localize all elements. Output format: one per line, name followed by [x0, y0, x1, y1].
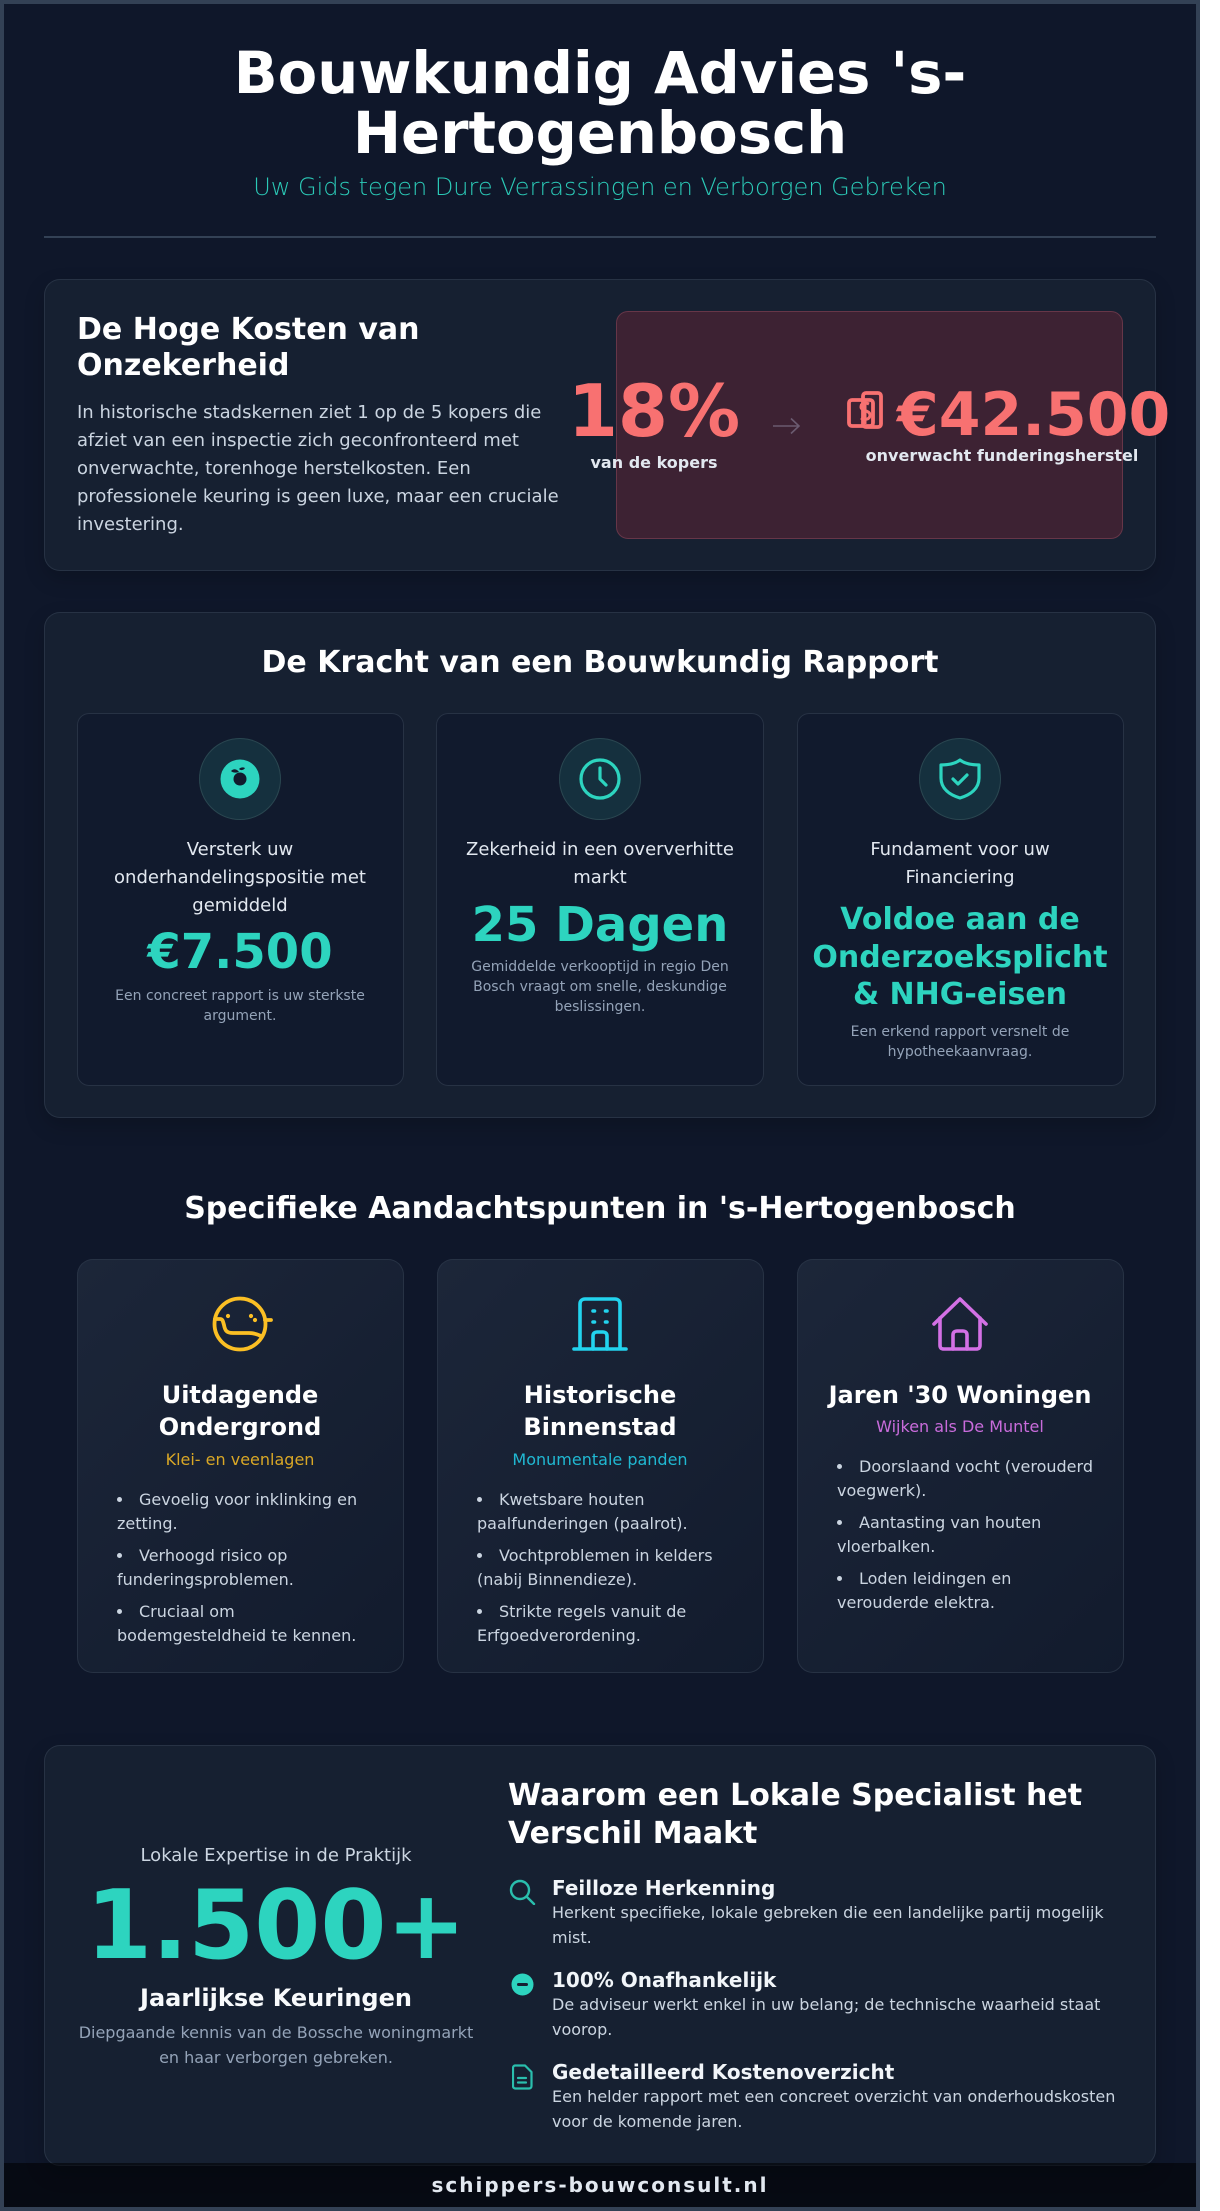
- card: historic centre: [437, 1259, 764, 1673]
- red callout box: [616, 311, 1123, 539]
- title: [234, 40, 966, 167]
- lead text: Versterk uw: [187, 839, 293, 860]
- bullet list: [117, 1490, 357, 1645]
- icon: target disc: [199, 738, 281, 820]
- bullet list: Erfgoedverordening.: [477, 1626, 641, 1645]
- panel: power of a report: [44, 612, 1156, 1118]
- stat label: funderingsherstel: onverwacht funderingsherstel: [866, 446, 1138, 465]
- expertise note: [79, 2023, 473, 2067]
- item text: De adviseur werkt enkel in uw belang; de technische waarheid staat: [552, 1995, 1100, 2014]
- icon: ground face: [212, 1296, 273, 1352]
- key figure: Onderzoeksplicht: [812, 940, 1108, 974]
- footer bar: [4, 2163, 1196, 2207]
- lead text: [466, 839, 734, 888]
- card: financing: [797, 713, 1124, 1086]
- card title: [159, 1381, 321, 1441]
- bullet list: Strikte regels vanuit de: [499, 1602, 686, 1621]
- note: Een erkend rapport versnelt de: [851, 1024, 1069, 1040]
- icon: money: [847, 391, 883, 429]
- key figure: & NHG-eisen: [853, 977, 1067, 1012]
- icon: document: [512, 2064, 533, 2090]
- subtitle: Uw Gids tegen Dure Verrassingen en Verborgen Gebreken: [253, 173, 947, 201]
- heading: [508, 1778, 1082, 1850]
- heading: specific points: Specifieke Aandachtspunten in 's-Hertogenbosch: [184, 1191, 1016, 1226]
- item text: Herkent specifieke, lokale gebreken die een landelijke partij mogelijk: [552, 1903, 1104, 1922]
- key figure label: Jaarlijkse Keuringen: [140, 1984, 412, 2012]
- icon: house: [932, 1297, 988, 1351]
- card title: Binnenstad: [523, 1413, 677, 1441]
- heading: Verschil Maakt: [508, 1816, 757, 1850]
- card: thirties homes: [797, 1259, 1124, 1673]
- card title: Uitdagende: [162, 1381, 318, 1409]
- item title: Feilloze Herkenning: [552, 1876, 775, 1900]
- bullet list: verouderde elektra.: [837, 1593, 995, 1612]
- card: negotiation: [77, 713, 404, 1086]
- intro text: In historische stadskernen ziet 1 op de 5 kopers die: [77, 402, 541, 423]
- bullet list: Gevoelig voor inklinking en: [139, 1490, 357, 1509]
- note: [471, 959, 729, 1015]
- bullet list: funderingsproblemen.: [117, 1570, 294, 1589]
- card title: [523, 1381, 677, 1441]
- item text: voor de komende jaren.: [552, 2112, 742, 2131]
- heading: Onzekerheid: [77, 348, 289, 383]
- website: schippers-bouwconsult.nl: [432, 2173, 768, 2197]
- intro text: afziet van een inspectie zich geconfronteerd met: [77, 430, 519, 451]
- card subtitle: Monumentale panden: [512, 1450, 688, 1469]
- lead text: [870, 839, 1050, 888]
- heading: De Kracht van een Bouwkundig Rapport: [262, 645, 938, 680]
- item text: [552, 1903, 1104, 1947]
- item title: Gedetailleerd Kostenoverzicht: [552, 2060, 894, 2084]
- card title: Ondergrond: [159, 1413, 321, 1441]
- card title: Historische: [524, 1381, 676, 1409]
- heading: [77, 312, 420, 383]
- item text: [552, 1995, 1100, 2039]
- panel: local expertise: [44, 1745, 1156, 2166]
- expertise label: Lokale Expertise in de Praktijk: [140, 1845, 412, 1866]
- item text: mist.: [552, 1928, 592, 1947]
- panel: high costs of uncertainty: [44, 279, 1156, 571]
- note: hypotheekaanvraag.: [888, 1044, 1032, 1060]
- card subtitle: Klei- en veenlagen: [166, 1450, 314, 1469]
- card: subsoil: [77, 1259, 404, 1673]
- heading: Waarom een Lokale Specialist het: [508, 1778, 1082, 1813]
- section: three attention cards: [77, 1259, 1124, 1673]
- heading: De Hoge Kosten van: [77, 312, 420, 347]
- item title: 100% Onafhankelijk: [552, 1968, 776, 1992]
- key figure: inspections: 1.500+: [86, 1871, 466, 1981]
- bullet list: paalfunderingen (paalrot).: [477, 1514, 688, 1533]
- card subtitle: Wijken als De Muntel: [876, 1417, 1044, 1436]
- icon: building: [572, 1297, 628, 1351]
- stat: 42500 euro: €42.500: [897, 380, 1170, 450]
- bullet list: [837, 1457, 1093, 1612]
- key figure: Voldoe aan de: [840, 902, 1080, 937]
- bullet list: voegwerk).: [837, 1481, 926, 1500]
- note: argument.: [204, 1008, 276, 1024]
- icon: shield: [919, 738, 1001, 820]
- lead text: onderhandelingspositie met: [114, 867, 366, 888]
- bullet list: zetting.: [117, 1514, 178, 1533]
- note: [115, 988, 365, 1024]
- note: Een concreet rapport is uw sterkste: [115, 988, 365, 1004]
- item text: [552, 2087, 1115, 2131]
- lead text: Financiering: [905, 867, 1015, 888]
- key figure: [812, 902, 1108, 1012]
- card title: Jaren '30 Woningen: [829, 1381, 1091, 1409]
- bullet list: bodemgesteldheid te kennen.: [117, 1626, 356, 1645]
- note: [851, 1024, 1069, 1060]
- lead text: markt: [573, 867, 627, 888]
- key figure: €7.500: [147, 924, 333, 980]
- key figure: 25 Dagen: [472, 897, 728, 953]
- lead text: gemiddeld: [192, 895, 288, 916]
- icon: clock: [559, 738, 641, 820]
- note: Bosch vraagt om snelle, deskundige: [473, 979, 727, 995]
- intro text: [77, 402, 559, 535]
- intro text: investering.: [77, 514, 184, 535]
- stat: 18 percent: 18%: [568, 369, 740, 453]
- bullet list: vloerbalken.: [837, 1537, 935, 1556]
- note: Gemiddelde verkooptijd in regio Den: [471, 959, 729, 975]
- expertise note: en haar verborgen gebreken.: [159, 2048, 393, 2067]
- bullet list: (nabij Binnendieze).: [477, 1570, 637, 1589]
- bullet list: Kwetsbare houten: [499, 1490, 644, 1509]
- icon: minus disc: [512, 1974, 534, 1996]
- stat label: kopers: van de kopers: [590, 453, 717, 472]
- item text: voorop.: [552, 2020, 612, 2039]
- note: beslissingen.: [555, 999, 645, 1015]
- bullet list: Loden leidingen en: [859, 1569, 1011, 1588]
- bullet list: Cruciaal om: [139, 1602, 235, 1621]
- arrow: [773, 418, 800, 434]
- bullet list: Doorslaand vocht (verouderd: [859, 1457, 1093, 1476]
- lead text: [114, 839, 366, 916]
- bullet list: Vochtproblemen in kelders: [499, 1546, 713, 1565]
- icon: search: [510, 1880, 536, 1905]
- intro text: onverwachte, torenhoge herstelkosten. Een: [77, 458, 471, 479]
- title: Bouwkundig Advies 's-: [234, 40, 966, 107]
- card: certainty: [436, 713, 764, 1086]
- bullet list: Aantasting van houten: [859, 1513, 1041, 1532]
- intro text: professionele keuring is geen luxe, maar een cruciale: [77, 486, 559, 507]
- bullet list: [477, 1490, 713, 1645]
- item text: Een helder rapport met een concreet overzicht van onderhoudskosten: [552, 2087, 1115, 2106]
- lead text: Zekerheid in een oververhitte: [466, 839, 734, 860]
- expertise note: Diepgaande kennis van de Bossche woningmarkt: [79, 2023, 473, 2042]
- title: Hertogenbosch: [353, 100, 847, 167]
- lead text: Fundament voor uw: [870, 839, 1050, 860]
- bullet list: Verhoogd risico op: [139, 1546, 287, 1565]
